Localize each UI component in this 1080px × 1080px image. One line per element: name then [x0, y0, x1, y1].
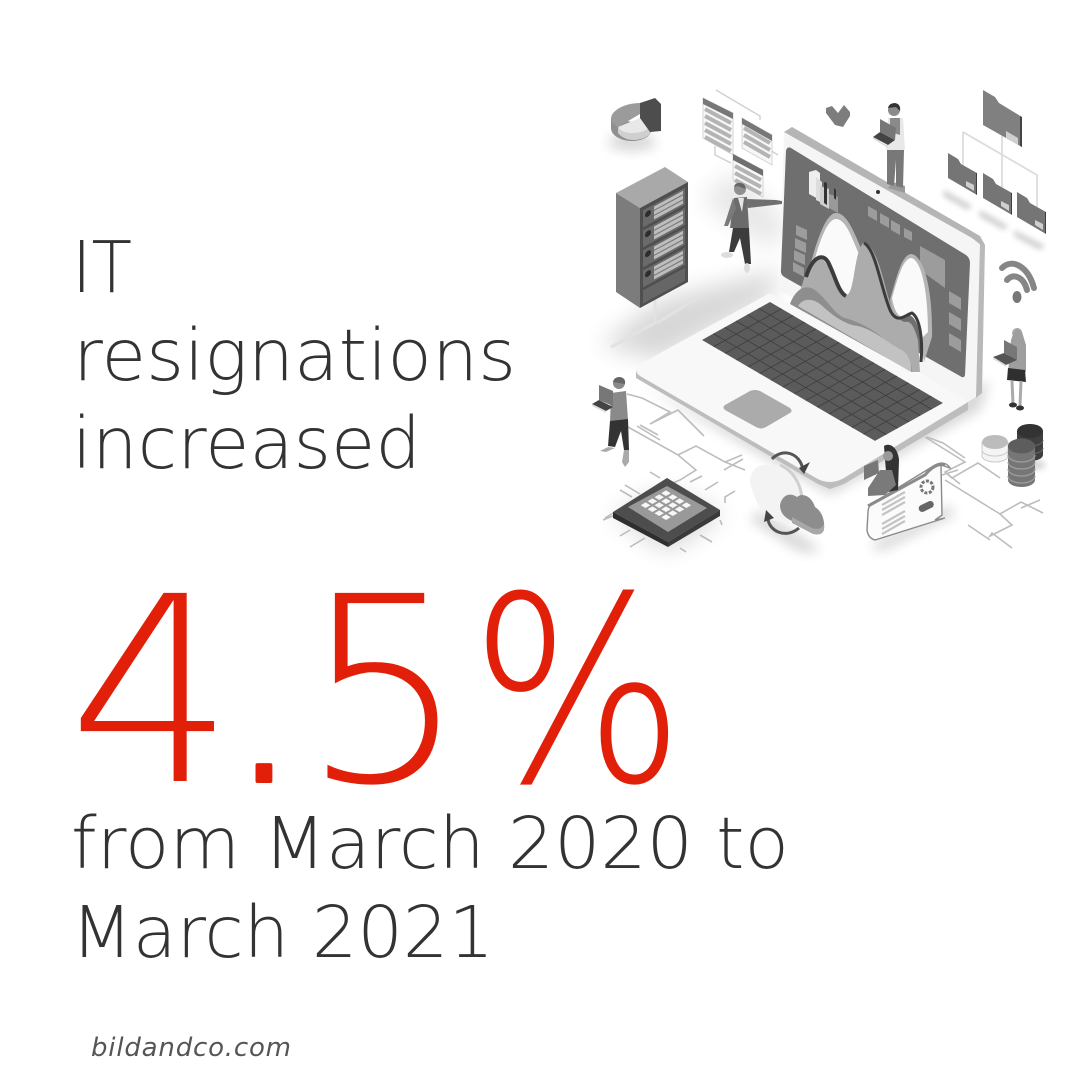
laptop base edge — [636, 370, 968, 489]
icon: processor chip — [603, 472, 735, 552]
icon: wifi — [1002, 264, 1034, 303]
icon: server rack — [616, 167, 688, 308]
small folders — [948, 153, 977, 195]
person: woman with laptop — [993, 328, 1026, 410]
laptop lid frame — [780, 127, 985, 402]
circuit lines — [627, 394, 1043, 548]
big statistic: 4.5%: 4 — [68, 542, 235, 842]
laptop base — [636, 293, 968, 482]
icon: pie chart — [611, 98, 661, 141]
icon: cloud sync — [750, 453, 824, 534]
camera — [876, 190, 880, 194]
heading: IT resignations increased: IT — [72, 226, 132, 309]
light stack — [982, 435, 1008, 462]
dark stack — [1017, 424, 1043, 461]
large folder — [983, 90, 1022, 147]
illustration: isometric laptop and IT scene — [592, 90, 1046, 552]
icon: database stacks — [982, 424, 1046, 487]
subheading: from March 2020 to March 2021 — [71, 802, 789, 974]
screen area chart — [790, 213, 932, 372]
big statistic: 4.5%: % — [470, 542, 685, 842]
woman seated with laptop — [864, 445, 899, 496]
icon: arrow shape — [826, 105, 850, 127]
heading: IT resignations increased: increased — [72, 402, 421, 485]
heading: IT resignations increased — [72, 226, 516, 485]
person: pointing man — [721, 183, 782, 273]
icon: settings card with woman — [864, 445, 950, 540]
laptop screen — [781, 147, 970, 377]
subheading: from March 2020 to March 2021: March 2021 — [71, 891, 494, 974]
icon: data tables — [703, 90, 778, 197]
soft ground shadows — [600, 133, 990, 552]
big statistic: 4.5% — [68, 542, 685, 842]
big statistic: 4.5%: 5 — [302, 542, 466, 842]
person: man with laptop at left — [592, 377, 629, 467]
screen tiles — [793, 206, 961, 352]
laptop — [636, 127, 985, 489]
screen bar chart — [809, 170, 838, 213]
icon: folder hierarchy — [943, 90, 1046, 250]
trackpad — [724, 390, 792, 428]
subheading: from March 2020 to March 2021: from March 2020 to — [71, 802, 789, 885]
person: standing man with laptop on lid — [873, 103, 905, 193]
website credit: bildandco.com — [91, 1033, 291, 1063]
big statistic: 4.5%: . — [223, 542, 305, 842]
heading: IT resignations increased: resignations — [73, 314, 516, 397]
mid stack — [1008, 438, 1035, 487]
keyboard — [702, 302, 943, 441]
